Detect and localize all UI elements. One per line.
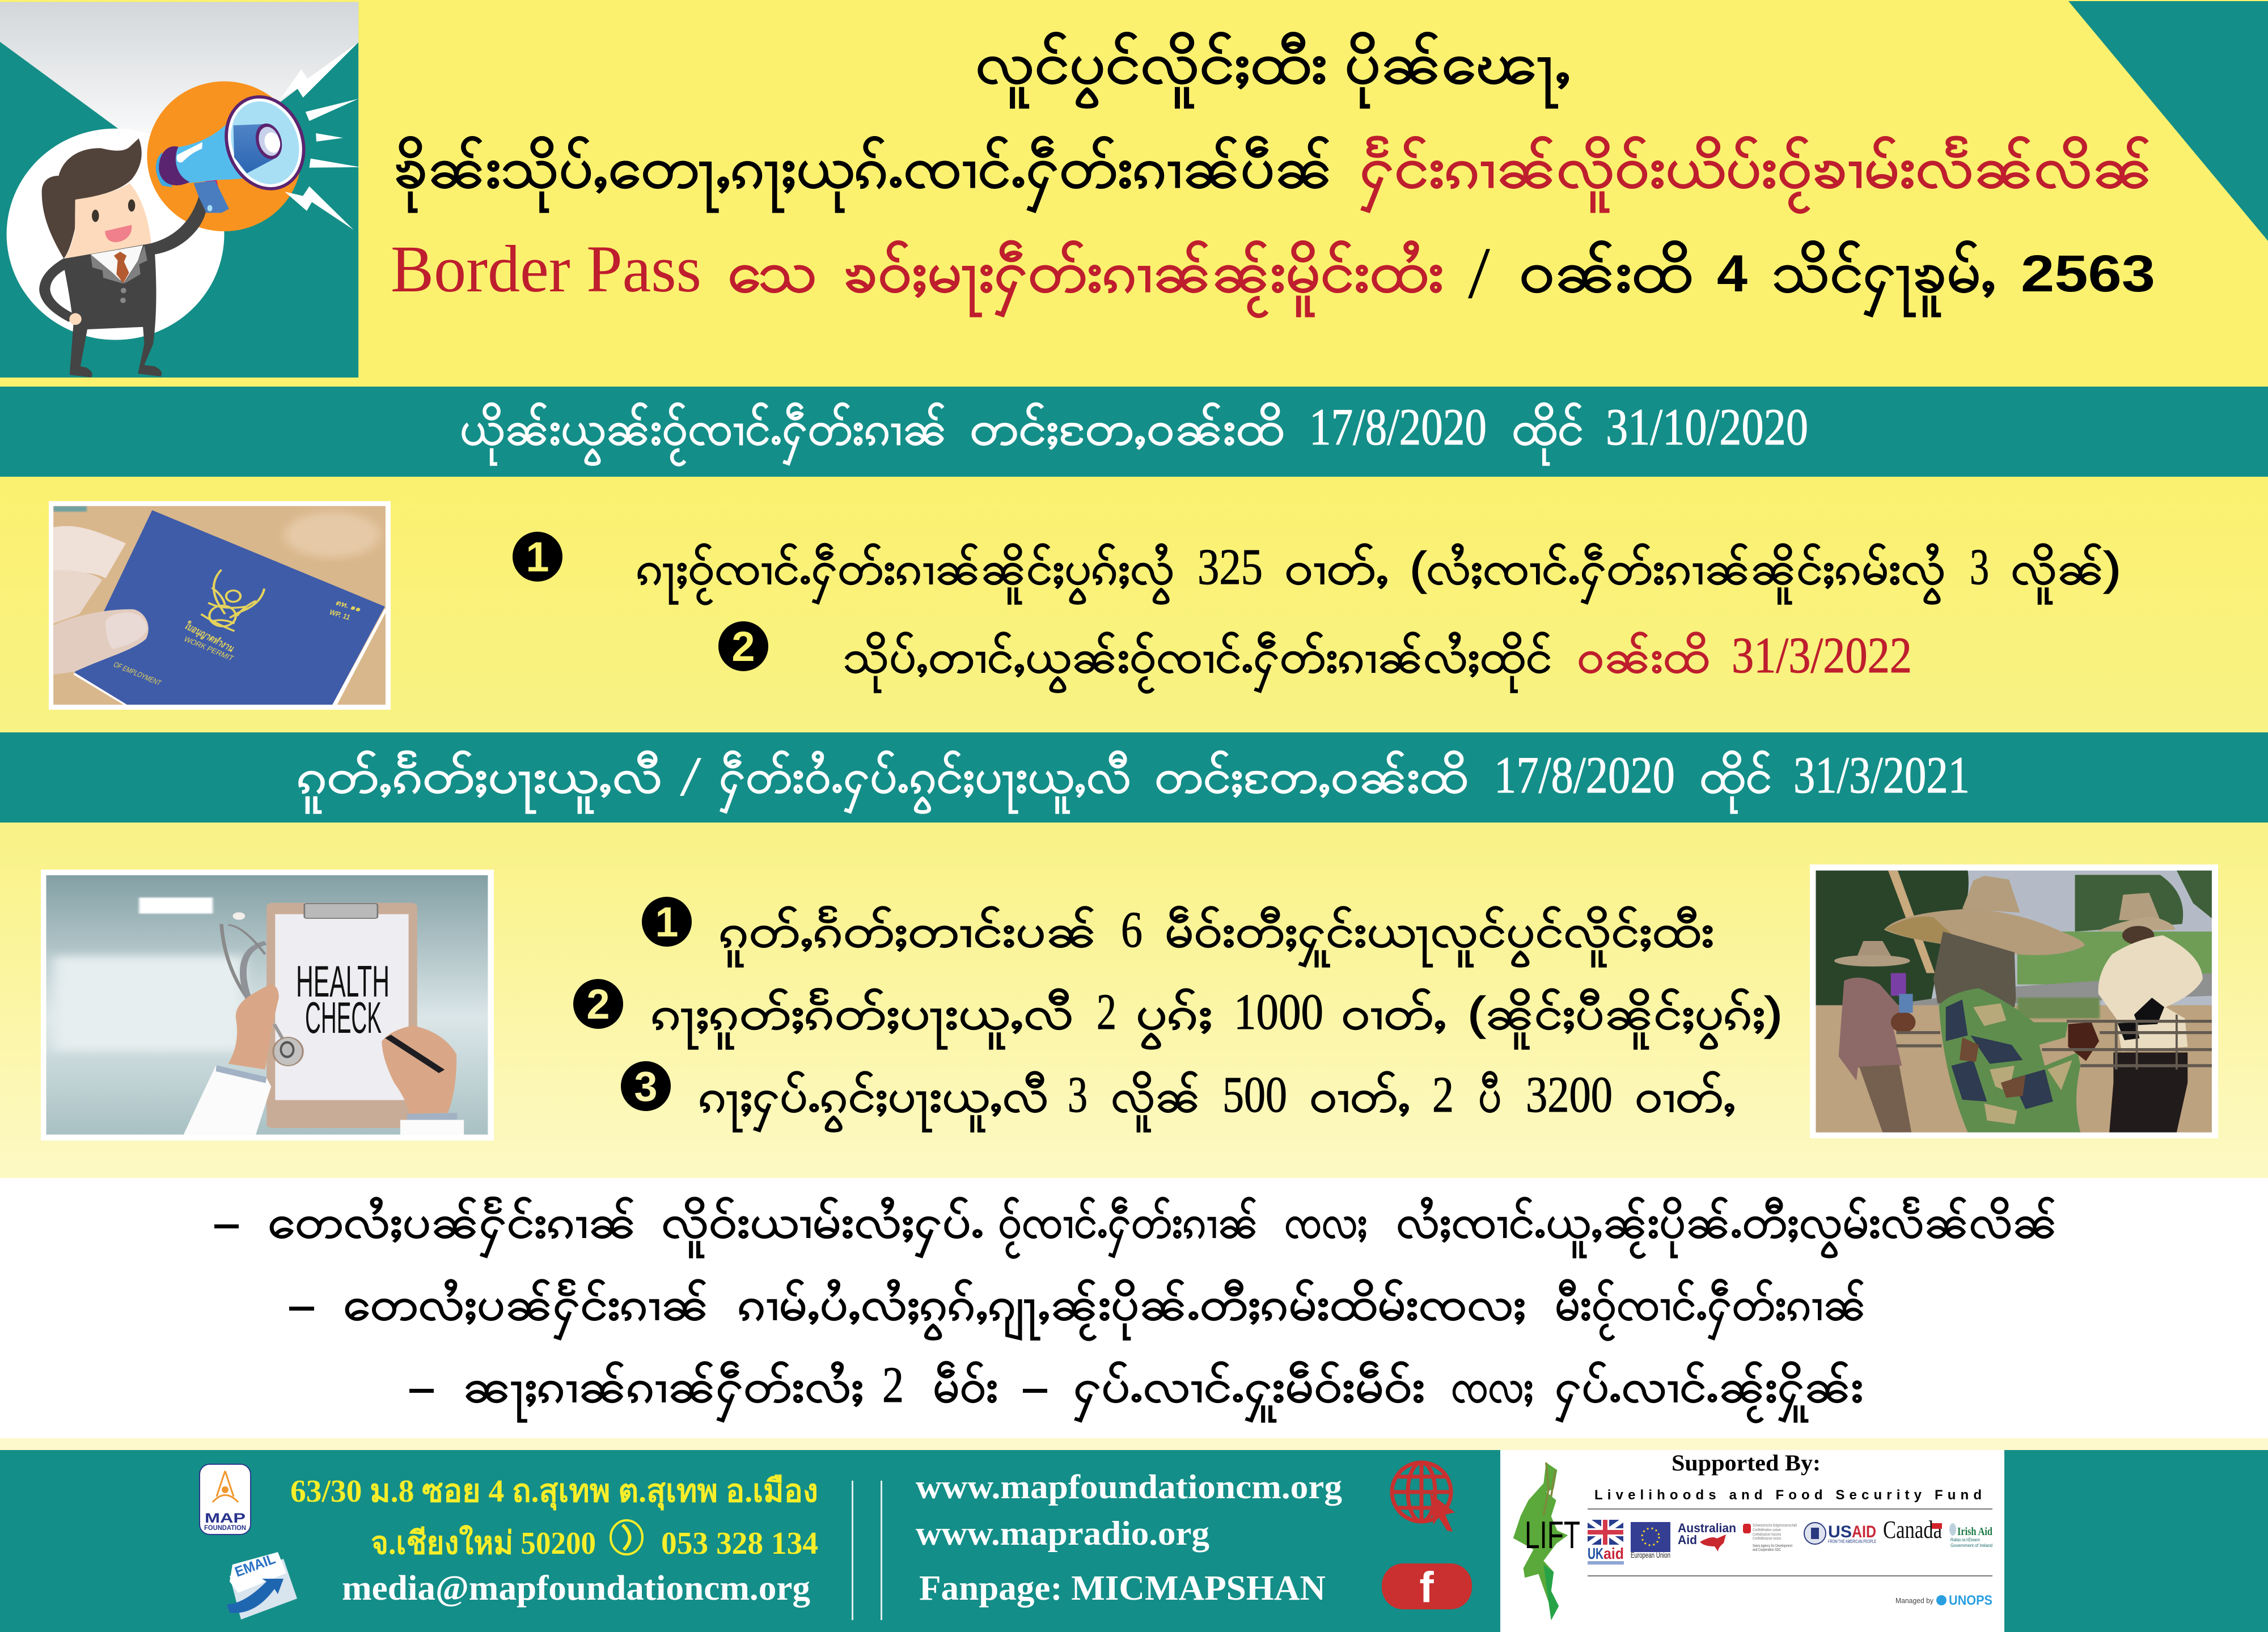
note line 1: ဝႂ်ၸၢင်ႉႁဵတ်းၵၢၼ်: [998, 1197, 1258, 1258]
address: [290, 1474, 818, 1561]
health term 1: ၵူတ်ႇၵႅတ်ႈတၢင်းပၼ်: [719, 906, 1097, 967]
logo: UNOPS: Managed by: [1895, 1596, 1933, 1605]
photo: migrant workers: [1810, 864, 2218, 1138]
health check handwriting: CHECK: [305, 993, 382, 1042]
photo: work permit book: [49, 501, 391, 710]
health term 1: မဵဝ်းတီႈႁူင်းယႃလူင်ပွင်လိူင်ႈထီး: [1165, 906, 1714, 967]
title: [391, 31, 2155, 319]
logo: UNOPS: [1895, 1593, 1992, 1608]
health term 3: 500: [1222, 1067, 1287, 1123]
note line 3: 2: [882, 1357, 904, 1413]
photo: work permit book: WP. 11: [328, 608, 352, 622]
address: 63/30 ม.8 ซอย 4 ถ.สุเทพ ต.สุเทพ อ.เมือง: [290, 1474, 818, 1511]
header background: [0, 0, 2268, 387]
slash: /: [1468, 232, 1491, 314]
note line 2: [289, 1279, 1866, 1341]
logo: Irish Aid: [1949, 1523, 1992, 1548]
logo: Swiss: Confédération suisse: [1753, 1528, 1781, 1532]
logo: Swiss: Confederaziun svizra: [1753, 1537, 1781, 1541]
term 2 text: [843, 628, 1912, 693]
bullet 2: 2: [731, 623, 755, 670]
fund name: Livelihoods and Food Security Fund: [1594, 1487, 1982, 1503]
heading bar 1: ယိုၼ်းယွၼ်းဝႂ်ၸၢင်ႉႁဵတ်းၵၢၼ်: [460, 402, 947, 466]
health bullet 3: 3: [634, 1063, 658, 1110]
term 1 text: [636, 539, 2121, 605]
note line 2: မီးဝႂ်ၸၢင်ႉႁဵတ်းၵၢၼ်: [1555, 1279, 1866, 1341]
websites: www.mapfoundationcm.org: [916, 1468, 1342, 1506]
icon: globe with cursor: [1392, 1463, 1455, 1532]
logo: EU: European Union: [1631, 1550, 1670, 1559]
icon: facebook: f: [1419, 1563, 1434, 1612]
websites: [916, 1468, 1342, 1608]
photo: work permit book: WORK PERMIT: [182, 635, 235, 663]
header corner triangle: [2068, 1, 2268, 241]
title: သိင်ႁႃၶူမ်ႇ: [1772, 240, 1996, 318]
logo: UK aid: [1588, 1520, 1624, 1565]
bullet 1: [513, 532, 562, 582]
title line 2 black: ၶိုၼ်းသိုပ်ႇတေႃႇၵႃႈယုၵ်ႉၸၢင်ႉႁဵတ်းၵၢၼ်ပဵၼ်: [393, 135, 1332, 214]
health term 2: 1000: [1234, 984, 1323, 1040]
term 2 text: 31/3/2022: [1732, 628, 1912, 684]
title: ဝၼ်းထိ: [1519, 240, 1692, 304]
term 1 text: လိူၼ်): [2011, 543, 2121, 604]
panel: LIFT supporters: LIFT: [1525, 1514, 1580, 1557]
term 2 text: သိုပ်ႇတၢင်ႇယွၼ်းဝႂ်ၸၢင်ႉႁဵတ်းၵၢၼ်လႆႈထိုင်: [843, 631, 1552, 693]
term 1 text: (လႆႈၸၢင်ႉႁဵတ်းၵၢၼ်ၼိူင်ႈၵမ်းလွႆ: [1410, 543, 1945, 604]
heading bar 2: ၵူတ်ႇၵႅတ်ႈပႃးယူႇလီ: [297, 751, 662, 813]
note line 2: တေလႆႈပၼ်ႁႅင်းၵၢၼ်: [343, 1279, 709, 1340]
notes: conditions: [214, 1197, 2057, 1423]
heading bar 2: ထိုင်: [1699, 751, 1772, 813]
logo: Irish Aid: Irish Aid: [1957, 1525, 1992, 1538]
health term 2: ဝၢတ်ႇ: [1341, 988, 1446, 1038]
panel: health background: [0, 823, 2268, 1178]
icon: email envelope: [227, 1551, 297, 1620]
title line 2 red: ႁႅင်းၵၢၼ်လိူဝ်းယိပ်းဝႂ်ၶၢမ်းလႅၼ်လိၼ်: [1360, 135, 2152, 214]
logo: EU: [1631, 1522, 1670, 1559]
logo: Australian Aid: Australian: [1678, 1521, 1736, 1535]
health term 3: 3: [1068, 1067, 1088, 1123]
logo: Irish Aid: Government of Ireland: [1950, 1543, 1992, 1548]
health term 2: (ၼိူင်ႈပီၼိူင်ႈပွၵ်ႈ): [1468, 988, 1782, 1049]
logo: Swiss: and Cooperation SDC: [1753, 1548, 1781, 1552]
icon: email envelope: EMAIL: [232, 1551, 278, 1580]
health bullet 1: 1: [655, 898, 679, 946]
note line 1: တေလႆႈပၼ်ႁႅင်းၵၢၼ်: [268, 1197, 636, 1258]
logo: Swiss: [1743, 1524, 1797, 1552]
note line 1: လႆႈၸၢင်ႉယူႇၼႂ်းပိုၼ်ႉတီႈလွမ်းလႅၼ်လိၼ်: [1396, 1197, 2057, 1258]
health bullet 3: [621, 1061, 671, 1111]
health check handwriting: [296, 956, 390, 1042]
term 2 text: ဝၼ်းထိ: [1577, 631, 1710, 682]
heading bar 1: 31/10/2020: [1606, 398, 1808, 456]
photo: health check: [41, 870, 494, 1141]
panel: notes background: [0, 1178, 2268, 1439]
health bullet 2: [573, 979, 623, 1029]
bullet 2: [718, 621, 768, 671]
email address: media@mapfoundationcm.org: [342, 1569, 810, 1608]
note line 1: ၸလႈ: [1284, 1197, 1367, 1247]
icon: MAP foundation logo: MAP: [205, 1511, 246, 1526]
title: ၶဝ်ႈမႃးႁဵတ်းၵၢၼ်ၼႂ်းမိူင်းထႆး: [843, 240, 1444, 319]
title line 3 border pass: Border Pass: [391, 232, 701, 306]
logo: USAID: US: [1828, 1523, 1852, 1541]
note line 1: လိူဝ်းယၢမ်းလႆႈႁပ်ႉ: [661, 1197, 984, 1258]
health term 3: ပီ: [1478, 1071, 1501, 1121]
list: work permit terms: [513, 532, 2121, 693]
heading bar 1: တင်ႈတႄႇဝၼ်းထိ: [970, 403, 1284, 455]
logo: UK aid: UK: [1588, 1545, 1603, 1562]
logo: USAID: AID: [1852, 1523, 1876, 1541]
photo: work permit book: OF EMPLOYMENT: [112, 661, 163, 688]
icon: MAP foundation logo: [200, 1464, 251, 1534]
term 1 text: 325: [1198, 539, 1263, 595]
panel: LIFT supporters: [1500, 1450, 2004, 1632]
health check handwriting: HEALTH: [296, 956, 390, 1006]
heading bar 1: [0, 387, 2268, 477]
logo: UK aid: aid: [1603, 1545, 1624, 1562]
footer background: [0, 1450, 2268, 1632]
health term 3: 3200: [1526, 1067, 1613, 1123]
icon: phone: [611, 1520, 642, 1554]
title line 1: လူင်ပွင်လိူင်ႈထီး ပိုၼ်ၽေႃႇ: [975, 31, 1571, 109]
health term 2: ပွၵ်ႈ: [1136, 988, 1212, 1049]
term 1 text: 3: [1970, 539, 1989, 595]
logo: Australian Aid: Aid: [1678, 1533, 1697, 1547]
heading bar 2: [0, 732, 2268, 823]
note line 3: ႁပ်ႉလၢင်ႉႁူးမဵဝ်းမဵဝ်း: [1073, 1361, 1425, 1422]
health term 3: [699, 1067, 1736, 1132]
note line 3: ၼႃႈၵၢၼ်ၵၢၼ်ႁဵတ်းလႆႈ: [463, 1361, 864, 1422]
health bullet 2: 2: [586, 981, 610, 1028]
health term 1: 6: [1121, 902, 1143, 958]
pale strip above footer: [0, 1438, 2268, 1450]
health term 2: 2: [1097, 984, 1116, 1040]
photo: work permit book: ตท. ๑๑: [335, 599, 362, 613]
websites: Fanpage: MICMAPSHAN: [919, 1569, 1326, 1608]
icon: LIFT map: [1513, 1463, 1568, 1620]
photo: work permit book: ใบอนุญาตทำงาน: [181, 620, 238, 655]
icon: MAP foundation logo: FOUNDATION: [204, 1524, 246, 1532]
logo: Swiss: Confederazione Svizzera: [1753, 1533, 1781, 1537]
heading bar 2: တင်ႈတႄႇဝၼ်းထိ: [1154, 751, 1468, 803]
heading bar 1: ထိုင်: [1512, 403, 1584, 465]
logo: UNOPS: UNOPS: [1949, 1593, 1992, 1608]
health term 3: 2: [1432, 1067, 1454, 1123]
health term 3: ၵႃႈႁပ်ႉၵွင်ႈပႃးယူႇလီ: [699, 1071, 1048, 1132]
address: 053 328 134: [661, 1526, 818, 1561]
term 1 text: ဝၢတ်ႇ: [1284, 543, 1389, 594]
title: 2563: [2021, 245, 2155, 303]
health term 2: ၵႃႈၵူတ်ႈၵႅတ်ႈပႃးယူႇလီ: [651, 988, 1073, 1049]
supported by: Supported By:: [1672, 1450, 1821, 1476]
health term 3: ဝၢတ်ႇ: [1309, 1071, 1410, 1121]
health bullet 1: [642, 897, 692, 947]
logo: USAID: [1804, 1523, 1876, 1544]
logo: Canada: Canada: [1883, 1516, 1942, 1544]
logo: Irish Aid: Rialtas na hÉireann: [1950, 1537, 1980, 1542]
heading bar 2: 17/8/2020: [1494, 746, 1675, 804]
health term 3: ဝၢတ်ႇ: [1635, 1071, 1736, 1121]
heading bar 2: ႁဵတ်းဝႆႉႁပ်ႉၵွင်ႈပႃးယူႇလီ: [719, 751, 1131, 813]
heading bar 2: /: [680, 745, 701, 808]
illustration: man with megaphone: [0, 2, 361, 378]
logo: USAID: FROM THE AMERICAN PEOPLE: [1828, 1539, 1876, 1544]
note line 3: မဵဝ်း: [933, 1361, 998, 1411]
heading bar 2: 31/3/2021: [1793, 746, 1970, 804]
health term 2: [651, 984, 1782, 1049]
note line 3: [409, 1357, 1863, 1423]
title line 3 red myanmar: သေ: [727, 240, 817, 304]
heading bar 1: 17/8/2020: [1309, 398, 1487, 456]
health term 3: လိူၼ်: [1111, 1071, 1200, 1131]
bullet 1: 1: [526, 533, 549, 580]
health term 1: [719, 902, 1714, 967]
note line 1: [214, 1197, 2057, 1258]
note line 3: ၸလႈ: [1451, 1361, 1533, 1411]
logo: Swiss: Swiss Agency for Development: [1753, 1544, 1792, 1548]
term 1 text: ၵႃႈဝႂ်ၸၢင်ႉႁဵတ်းၵၢၼ်ၼိူင်ႈပွၵ်ႈလွႆ: [636, 543, 1174, 605]
title: 4: [1717, 245, 1747, 303]
address: จ.เชียงใหม่ 50200: [371, 1524, 596, 1561]
note line 3: ႁပ်ႉလၢင်ႉၼႂ်းႁိူၼ်း: [1555, 1361, 1863, 1423]
logo: Australian Aid: [1678, 1521, 1736, 1552]
note line 2: ၵၢမ်ႇပႆႇလႆႈၵွၵ်ႇၵျႃႇၼႂ်းပိုၼ်ႉတီႈၵမ်းထိမ်းၸလႈ: [738, 1279, 1526, 1341]
icon: facebook: [1382, 1563, 1472, 1612]
websites: www.mapradio.org: [916, 1515, 1209, 1552]
panel: work permit background: [0, 477, 2268, 732]
logo: Swiss: Schweizerische Eidgenossenschaft: [1753, 1524, 1797, 1528]
list: health terms: [573, 897, 1782, 1132]
